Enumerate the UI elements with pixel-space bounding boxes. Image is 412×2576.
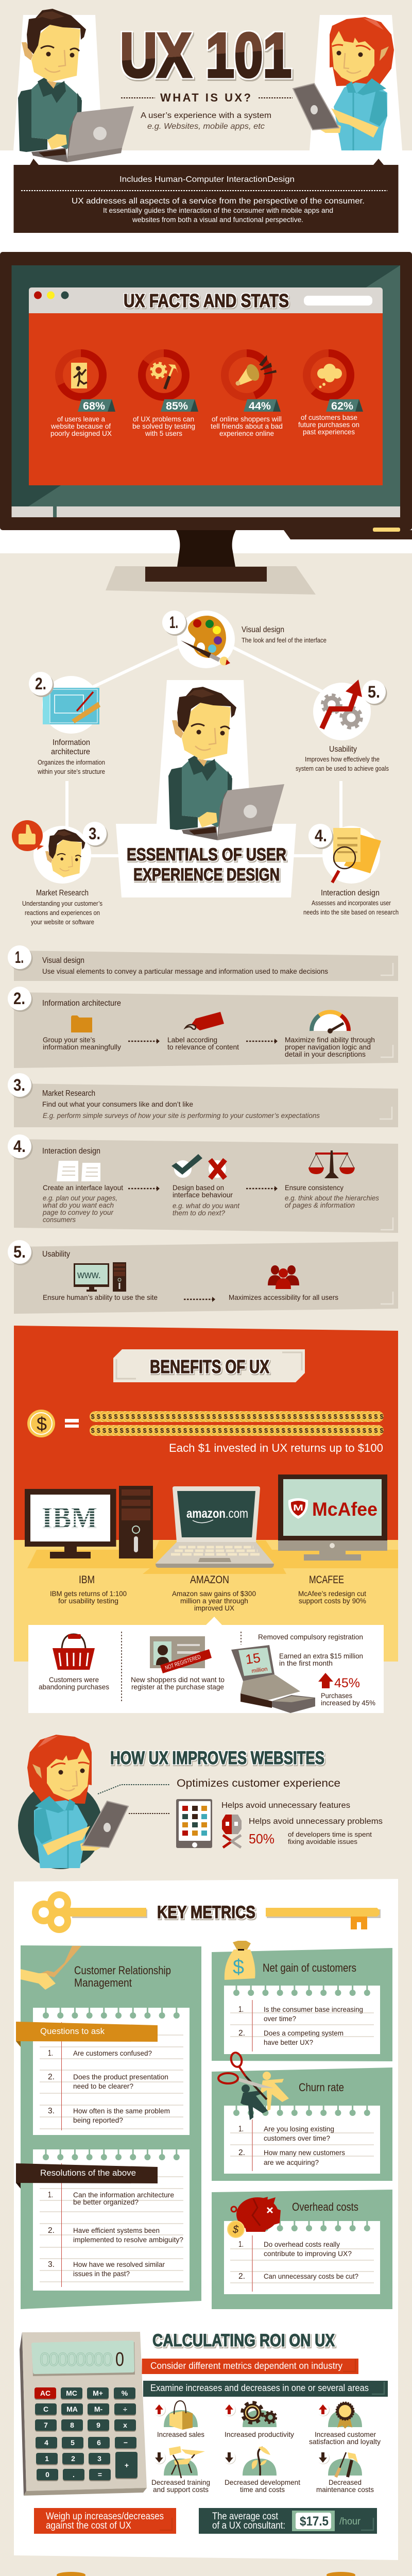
- icon: broken piggy bank: [228, 2197, 281, 2238]
- band 4: interaction design: 4.: [13, 1137, 26, 1156]
- band 2: information architecture: information meaningfully: [43, 1043, 121, 1051]
- node 2: information architecture: Information: [53, 738, 90, 747]
- stat: 68 percent: of users leave a: [57, 415, 105, 423]
- illustration: calculator: MA: [66, 2405, 78, 2413]
- item: decreased development: [223, 2447, 300, 2494]
- stat: 85 percent: with 5 users: [145, 430, 182, 437]
- callout: average consultant cost: /hour: [339, 2516, 361, 2527]
- note: resolutions of the above: [16, 2149, 190, 2291]
- case study: McAfee: McAfee’s redesign cut: [298, 1589, 366, 1598]
- heading: benefits of UX: BENEFITS OF UX: [150, 1356, 269, 1377]
- panel: spotlight right: [310, 15, 402, 150]
- item: increased sales: Increased sales: [157, 2430, 204, 2438]
- case study: McAfee: support costs by 90%: [299, 1597, 366, 1605]
- panel: UX definition: It essentially guides the interaction of the consumer with mobile apps and: [103, 207, 333, 214]
- band 4: interaction design: page to convey to your: [42, 1208, 114, 1216]
- stat: 62 percent: [298, 353, 363, 436]
- icon: large coin: $: [37, 1413, 47, 1434]
- band 3: market research: 3.: [13, 1076, 25, 1094]
- node 5: usability: 5.: [368, 683, 380, 701]
- note: resolutions of the above: Have efficient systems been: [73, 2226, 160, 2234]
- callout: weigh up increases: against the cost of UX: [46, 2520, 131, 2531]
- band 4: interaction design: Create an interface layout: [43, 1183, 123, 1192]
- stat: 68 percent: poorly designed UX: [50, 430, 112, 437]
- heading: essentials of user experience design: EXPERIENCE DESIGN: [133, 865, 280, 885]
- heading: essentials of user experience design: [127, 845, 286, 885]
- illustration: monitor stand shadow: [106, 566, 316, 595]
- stat: 44 percent: 44%: [249, 400, 271, 412]
- item: increased customer satisfaction: satisfaction and loyalty: [309, 2437, 381, 2446]
- illustration: calculator: 6: [97, 2438, 101, 2447]
- illustration: calculator: [20, 2332, 147, 2496]
- item: increased productivity: Increased productivity: [225, 2430, 294, 2438]
- icon: cash register: 15: [245, 1650, 261, 1667]
- stat: 85 percent: of UX problems can: [133, 415, 194, 423]
- note: resolutions of the above: 2.: [48, 2226, 55, 2235]
- case study: Amazon: Amazon saw gains of $300: [172, 1589, 256, 1598]
- note: questions to ask: Are customers confused?: [73, 2049, 152, 2057]
- panel: key metrics backdrop: [14, 1879, 398, 2560]
- node 3: market research: Understanding your customer’s: [22, 900, 102, 907]
- callout: average consultant cost: [199, 2508, 377, 2534]
- item: increased productivity: [223, 2403, 294, 2438]
- text: developers time: of developers time is spent: [288, 1831, 372, 1838]
- icon: speedometer: [310, 1010, 351, 1033]
- node 3: market research: Market Research: [36, 889, 89, 897]
- item: decreased maintenance: maintenance costs: [316, 2485, 374, 2494]
- callout: average consultant cost: $17.5: [300, 2514, 329, 2529]
- note: questions to ask: [16, 2008, 190, 2135]
- icon: desktop computer: [74, 1262, 126, 1292]
- case study: Amazon: million a year through: [180, 1597, 248, 1605]
- text: developers time: fixing avoidable issues: [288, 1838, 358, 1845]
- heading: UX facts and stats: UX FACTS AND STATS: [124, 290, 289, 311]
- heading: what is UX: WHAT IS UX?: [160, 91, 251, 104]
- node 1: visual design: 1.: [169, 613, 178, 632]
- note: resolutions of the above: issues in the past?: [73, 2269, 130, 2278]
- panel: header background: [0, 0, 412, 150]
- band 2: information architecture: detail in your descriptions: [285, 1050, 366, 1058]
- node 3: market research: 3.: [89, 824, 100, 843]
- illustration: calculator: 5: [71, 2438, 75, 2447]
- panel: churn rate: Are you losing existing: [264, 2125, 334, 2133]
- node 4: interaction design: Interaction design: [321, 889, 380, 897]
- band 3: market research: [8, 1073, 398, 1127]
- text: avoid unnecessary problems: Helps avoid unnecessary problems: [249, 1817, 383, 1826]
- case study: Amazon: improved UX: [194, 1604, 235, 1612]
- case study: Amazon: [172, 1574, 256, 1612]
- band 2: information architecture: proper navigation logic and: [285, 1043, 371, 1051]
- panel: Amazon case detail: Customers were: [49, 1675, 99, 1684]
- section: how UX improves websites: [18, 1735, 128, 1869]
- callout: average consultant cost: The average cost: [212, 2511, 279, 2522]
- illustration: McAfee monitor: McAfee: [312, 1499, 377, 1520]
- stat: 44 percent: [211, 353, 283, 437]
- heading: key metrics: KEY METRICS: [157, 1903, 255, 1922]
- item: decreased development: time and costs: [240, 2485, 285, 2494]
- panel: churn rate: How many new customers: [264, 2148, 345, 2157]
- callout: weigh up increases: Weigh up increases/decreases: [46, 2511, 164, 2522]
- note: questions to ask: Does the product presentation: [73, 2073, 168, 2081]
- item: decreased training: Decreased training: [151, 2478, 210, 2486]
- icon: check and cross: [171, 1154, 226, 1178]
- band 4: interaction design: Interaction design: [42, 1147, 100, 1156]
- panel: net gain of customers: [212, 1941, 392, 2061]
- panel: Amazon case detail: Removed compulsory registration: [258, 1633, 363, 1641]
- node 4: interaction design: needs into the site based on research: [303, 908, 399, 916]
- panel: customer relationship management: Management: [74, 1976, 132, 1989]
- band 4: interaction design: e.g. what do you want: [173, 1201, 240, 1210]
- illustration: calculator: 0: [115, 2349, 124, 2370]
- text: examples: e.g. Websites, mobile apps, etc: [147, 122, 265, 131]
- panel: monitor with facts and stats: [0, 252, 412, 539]
- icon: up arrow: [318, 1673, 333, 1688]
- node 2: information architecture: Organizes the information: [38, 758, 105, 766]
- node 5: usability: Usability: [329, 745, 357, 754]
- panel: overhead costs: 2.: [238, 2272, 245, 2281]
- panel: net gain of customers: Is the consumer base increasing: [264, 2005, 363, 2013]
- node 1: visual design: [162, 611, 327, 668]
- stat: 62 percent: 62%: [331, 400, 353, 412]
- band 3: market research: E.g. perform simple surveys of how your site is performing to your customer’s expectations: [43, 1111, 320, 1120]
- band 1: visual design: [8, 945, 398, 981]
- band 5: usability: Usability: [42, 1250, 70, 1259]
- stat: 85 percent: be solved by testing: [132, 422, 195, 430]
- band 2: information architecture: Maximize find ability through: [285, 1036, 375, 1044]
- node 3: market research: [12, 820, 108, 926]
- panel: churn rate: 1.: [238, 2125, 244, 2133]
- node 4: interaction design: 4.: [315, 826, 327, 845]
- panel: overhead costs: 1.: [238, 2240, 244, 2249]
- band 2: information architecture: Information architecture: [42, 999, 121, 1008]
- panel: Amazon case detail: Purchases: [321, 1691, 352, 1700]
- illustration: calculator: 3: [97, 2454, 101, 2463]
- panel: overhead costs: Can unnecessary costs be cut?: [264, 2272, 358, 2280]
- stat: 85 percent: 85%: [166, 400, 188, 412]
- band 3: market research: Market Research: [42, 1089, 95, 1098]
- illustration: calculator: C: [43, 2405, 48, 2413]
- illustration: calculator: 00000000: [40, 2349, 113, 2370]
- stat: 50 percent: 50%: [249, 1831, 274, 1846]
- note: resolutions of the above: implemented to resolve ambiguity?: [73, 2235, 183, 2244]
- illustration: calculator: %: [122, 2389, 128, 2397]
- stat: 68 percent: website because of: [50, 422, 111, 430]
- text: optimizes customer experience: Optimizes customer experience: [177, 1777, 340, 1789]
- dotted rule left: [121, 97, 155, 98]
- text: return on investment: Each $1 invested in UX returns up to $100: [169, 1442, 383, 1454]
- panel: Amazon case detail: in the first month: [279, 1659, 333, 1667]
- case study: McAfee: [298, 1574, 366, 1605]
- dotted leader lines: [98, 1785, 169, 1814]
- icon: ID card not registered: [150, 1636, 212, 1673]
- band 2: information architecture: 2.: [13, 989, 25, 1008]
- panel: Amazon case detail: register at the purchase stage: [131, 1683, 224, 1691]
- panel: net gain of customers: 2.: [238, 2029, 245, 2038]
- illustration: monitor stand: [145, 530, 267, 582]
- browser window: [29, 287, 383, 485]
- illustration: IBM desktop: [25, 1486, 153, 1558]
- illustration: calculator: ÷: [123, 2405, 127, 2413]
- illustration: calculator: 4: [44, 2438, 48, 2447]
- panel: Amazon case detail: [28, 1617, 384, 1713]
- illustration: man with laptop: [18, 9, 134, 162]
- icon: folder: [71, 1015, 92, 1032]
- panel: net gain of customers: over time?: [264, 2014, 296, 2023]
- panel: Amazon case detail: 45%: [334, 1676, 360, 1690]
- heading: benefits of UX: [113, 1349, 305, 1382]
- panel: churn rate: are we acquiring?: [264, 2158, 319, 2166]
- background: cream page section: [0, 553, 412, 2576]
- illustration: calculator: .: [73, 2470, 75, 2479]
- band 2: information architecture: Group your site’s: [43, 1036, 95, 1044]
- illustration: IBM desktop: IBM: [42, 1501, 97, 1535]
- note: resolutions of the above: 3.: [48, 2260, 55, 2269]
- band 4: interaction design: interface behaviour: [173, 1191, 233, 1199]
- band 4: interaction design: them to do next?: [173, 1209, 225, 1217]
- panel: Amazon case detail: New shoppers did not want to: [131, 1675, 225, 1684]
- illustration: Amazon laptop: [156, 1486, 274, 1568]
- item: decreased training: [151, 2446, 210, 2494]
- icon: tablet apps: [176, 1799, 212, 1848]
- icon: desktop computer: www.: [77, 1269, 101, 1281]
- icon: key: [32, 1891, 381, 1933]
- illustration: calculator: 2: [71, 2454, 75, 2463]
- node 3: market research: your website or software: [31, 918, 94, 926]
- panel: net gain of customers: 1.: [238, 2005, 244, 2014]
- callout: consider different metrics: Consider different metrics dependent on industry: [150, 2360, 343, 2371]
- band 2: information architecture: to relevance of content: [167, 1043, 239, 1051]
- icon: skull: [222, 1815, 242, 1848]
- panel: net gain of customers: Does a competing system: [264, 2029, 344, 2037]
- illustration: calculator: x: [123, 2421, 127, 2429]
- icon: handshake: [21, 1946, 81, 1990]
- band 4: interaction design: of pages & information: [285, 1201, 355, 1209]
- panel: overhead costs: contribute to improving UX?: [264, 2249, 352, 2258]
- panel: benefits of UX: [14, 1326, 398, 1662]
- band 1: visual design: 1.: [15, 948, 24, 967]
- panel: churn rate: Churn rate: [299, 2081, 344, 2094]
- node 1: visual design: Visual design: [242, 625, 284, 634]
- node 3: market research: reactions and experiences on: [25, 909, 100, 917]
- illustration: Amazon laptop: amazon.com: [186, 1506, 248, 1521]
- panel: net gain of customers: Net gain of customers: [263, 1961, 356, 1974]
- illustration: calculator: 8: [70, 2421, 74, 2429]
- icon: trophy right: [318, 2572, 364, 2576]
- icon: notepads: [57, 1161, 100, 1181]
- stat: 85 percent: [132, 353, 198, 437]
- icon: money bag: $: [233, 1956, 244, 1978]
- node 2: information architecture: architecture: [51, 748, 90, 756]
- illustration: calculator: M+: [93, 2389, 103, 2397]
- case study: IBM: for usability testing: [58, 1597, 118, 1605]
- illustration: calculator: 9: [96, 2421, 100, 2429]
- panel: UX definition: websites from both a visual and functional perspective.: [132, 216, 303, 224]
- note: questions to ask: Questions to ask: [40, 2026, 105, 2036]
- note: resolutions of the above: Resolutions of the above: [40, 2168, 136, 2178]
- callout: average consultant cost: of a UX consultant:: [212, 2520, 285, 2531]
- illustration: calculator: M-: [94, 2405, 102, 2413]
- note: questions to ask: need to be clearer?: [73, 2082, 133, 2090]
- panel: UX definition: Includes Human-Computer InteractionDesign: [119, 175, 295, 184]
- heading: how UX improves websites: HOW UX IMPROVES WEBSITES: [110, 1748, 324, 1768]
- note: resolutions of the above: Can the information architecture: [73, 2191, 174, 2199]
- illustration: calculator: 7: [44, 2421, 48, 2429]
- note: questions to ask: being reported?: [73, 2116, 123, 2124]
- band 4: interaction design: e.g. plan out your pages,: [43, 1194, 117, 1202]
- case study: Amazon: AMAZON: [190, 1574, 229, 1586]
- node 1: visual design: The look and feel of the interface: [242, 636, 327, 644]
- stat: 44 percent: experience online: [219, 430, 274, 437]
- panel: Amazon case detail: Earned an extra $15 million: [279, 1652, 363, 1660]
- note: resolutions of the above: be better organized?: [73, 2198, 139, 2206]
- chart: one hundred coins: [90, 1411, 384, 1436]
- band 2: information architecture: Label according: [167, 1036, 217, 1044]
- band 1: visual design: Visual design: [42, 956, 84, 965]
- dotted rule right: [259, 97, 293, 98]
- illustration: McAfee monitor: M: [293, 1503, 303, 1513]
- case study: IBM: [50, 1574, 127, 1605]
- note: resolutions of the above: 1.: [48, 2191, 53, 2199]
- node 5: usability: Improves how effectively the: [305, 755, 380, 763]
- text: avoid unnecessary features: Helps avoid unnecessary features: [221, 1801, 350, 1810]
- illustration: man with laptop: [168, 687, 284, 840]
- band 3: market research: Find out what your consumers like and don’t like: [42, 1100, 193, 1108]
- band 4: interaction design: e.g. think about the hierarchies: [285, 1194, 379, 1202]
- illustration: McAfee monitor: [278, 1475, 387, 1561]
- band 4: interaction design: [8, 1134, 398, 1233]
- note: resolutions of the above: How have we resolved similar: [73, 2260, 165, 2268]
- panel: overhead costs: [212, 2190, 392, 2309]
- item: decreased maintenance: Decreased: [329, 2478, 362, 2486]
- panel: customer relationship management: [16, 1945, 201, 2309]
- item: increased sales: [153, 2401, 204, 2438]
- note: questions to ask: How often is the same problem: [73, 2107, 170, 2115]
- icon: ID card not registered: NOT REGISTERED: [164, 1654, 201, 1671]
- item: increased customer satisfaction: [309, 2402, 381, 2446]
- node 2: information architecture: 2.: [35, 674, 46, 693]
- text: developers time: [288, 1831, 372, 1845]
- stat: 62 percent: future purchases on: [298, 421, 359, 429]
- item: increased customer satisfaction: Increased customer: [315, 2430, 376, 2438]
- illustration: calculator: MC: [66, 2389, 77, 2397]
- callout: examine increases and decreases: Examine increases and decreases in one or several areas: [150, 2382, 369, 2393]
- panel: Amazon case detail: abandoning purchases: [39, 1683, 109, 1691]
- panel: UX definition: UX addresses all aspects of a service from the perspective of the consumer.: [72, 197, 365, 206]
- stat: 62 percent: past experiences: [303, 428, 355, 436]
- icon: tag: [185, 1012, 224, 1030]
- node 2: information architecture: [29, 672, 105, 775]
- illustration: calculator: −: [124, 2438, 128, 2447]
- text: definition: A user’s experience with a system: [141, 111, 271, 120]
- case study: IBM: IBM gets returns of 1:100: [50, 1589, 127, 1598]
- illustration: calculator: +: [125, 2461, 129, 2469]
- icon: scales: [308, 1150, 355, 1178]
- band 1: visual design: Use visual elements to convey a particular message and information used to make decisions: [42, 967, 328, 975]
- note: questions to ask: 2.: [48, 2073, 55, 2081]
- panel: churn rate: customers over time?: [264, 2134, 330, 2142]
- heading: calculating ROI on UX: CALCULATING ROI ON UX: [152, 2331, 335, 2350]
- panel: churn rate: 2.: [238, 2148, 245, 2157]
- band 5: usability: Maximizes accessibility for all users: [229, 1293, 338, 1301]
- illustration: calculator: AC: [40, 2389, 50, 2397]
- icon: trophy left: [48, 2572, 94, 2576]
- item: decreased training: and support costs: [153, 2485, 209, 2494]
- stat: 44 percent: tell friends about a bad: [211, 422, 283, 430]
- band 5: usability: Ensure human’s ability to use the site: [43, 1293, 158, 1301]
- band 2: information architecture: [8, 987, 398, 1068]
- icon: cash register: [231, 1645, 315, 1713]
- connector lines: [67, 647, 341, 856]
- band 4: interaction design: Ensure consistency: [285, 1183, 344, 1192]
- illustration: calculator: 1: [45, 2454, 49, 2463]
- band 4: interaction design: consumers: [43, 1215, 76, 1224]
- icon: broken piggy bank: $: [232, 2224, 239, 2235]
- band 5: usability: [8, 1240, 398, 1314]
- node 4: interaction design: Assesses and incorporates user: [312, 899, 391, 907]
- node 2: information architecture: within your site’s structure: [37, 768, 105, 775]
- illustration: calculator: 0: [45, 2470, 49, 2479]
- item: decreased maintenance: [316, 2451, 374, 2494]
- panel: spotlight left: [13, 15, 102, 150]
- stat: 44 percent: of online shoppers will: [212, 415, 282, 423]
- panel: customer relationship management: Customer Relationship: [74, 1964, 171, 1977]
- case study: McAfee: MCAFEE: [309, 1574, 344, 1586]
- illustration: calculator: =: [98, 2470, 102, 2479]
- panel: UX definition: [13, 159, 399, 233]
- equals sign: [65, 1419, 79, 1428]
- icon: money bag: [225, 1941, 255, 1980]
- icon: cash register: million: [251, 1666, 268, 1674]
- callout: weigh up increases: [34, 2508, 176, 2534]
- band 5: usability: 5.: [13, 1243, 26, 1261]
- panel: Amazon case detail: increased by 45%: [321, 1699, 375, 1707]
- case study: IBM: IBM: [79, 1574, 95, 1586]
- panel: overhead costs: Do overhead costs really: [264, 2240, 340, 2248]
- icon: scissors cutting paper people: [218, 2052, 289, 2120]
- icon: people: [268, 1265, 299, 1289]
- node 4: interaction design: [303, 824, 399, 916]
- stat: 68 percent: [50, 353, 115, 437]
- callout: examine increases and decreases: [143, 2381, 388, 2397]
- panel: essentials centre backdrop: [116, 680, 296, 897]
- band 4: interaction design: what do you want each: [43, 1201, 114, 1209]
- stat: 62 percent: of customers base: [301, 414, 357, 421]
- icon: basket: [53, 1634, 95, 1670]
- title: UX 101: [120, 20, 291, 90]
- heading: essentials of user experience design: ESSENTIALS OF USER: [127, 845, 286, 865]
- stat: 68 percent: 68%: [83, 400, 105, 412]
- band 4: interaction design: Design based on: [173, 1183, 224, 1192]
- panel: churn rate: [212, 2052, 392, 2181]
- item: decreased development: Decreased development: [225, 2478, 300, 2486]
- node 5: usability: system can be used to achieve goals: [296, 765, 389, 772]
- note: questions to ask: 3.: [48, 2107, 55, 2115]
- node 5: usability: [296, 680, 389, 772]
- icon: large coin: [27, 1410, 55, 1437]
- panel: overhead costs: Overhead costs: [292, 2200, 358, 2213]
- panel: net gain of customers: have better UX?: [264, 2038, 313, 2046]
- callout: consider different metrics: [142, 2359, 358, 2374]
- illustration: woman with tablet: [293, 17, 394, 150]
- note: questions to ask: 1.: [48, 2049, 53, 2058]
